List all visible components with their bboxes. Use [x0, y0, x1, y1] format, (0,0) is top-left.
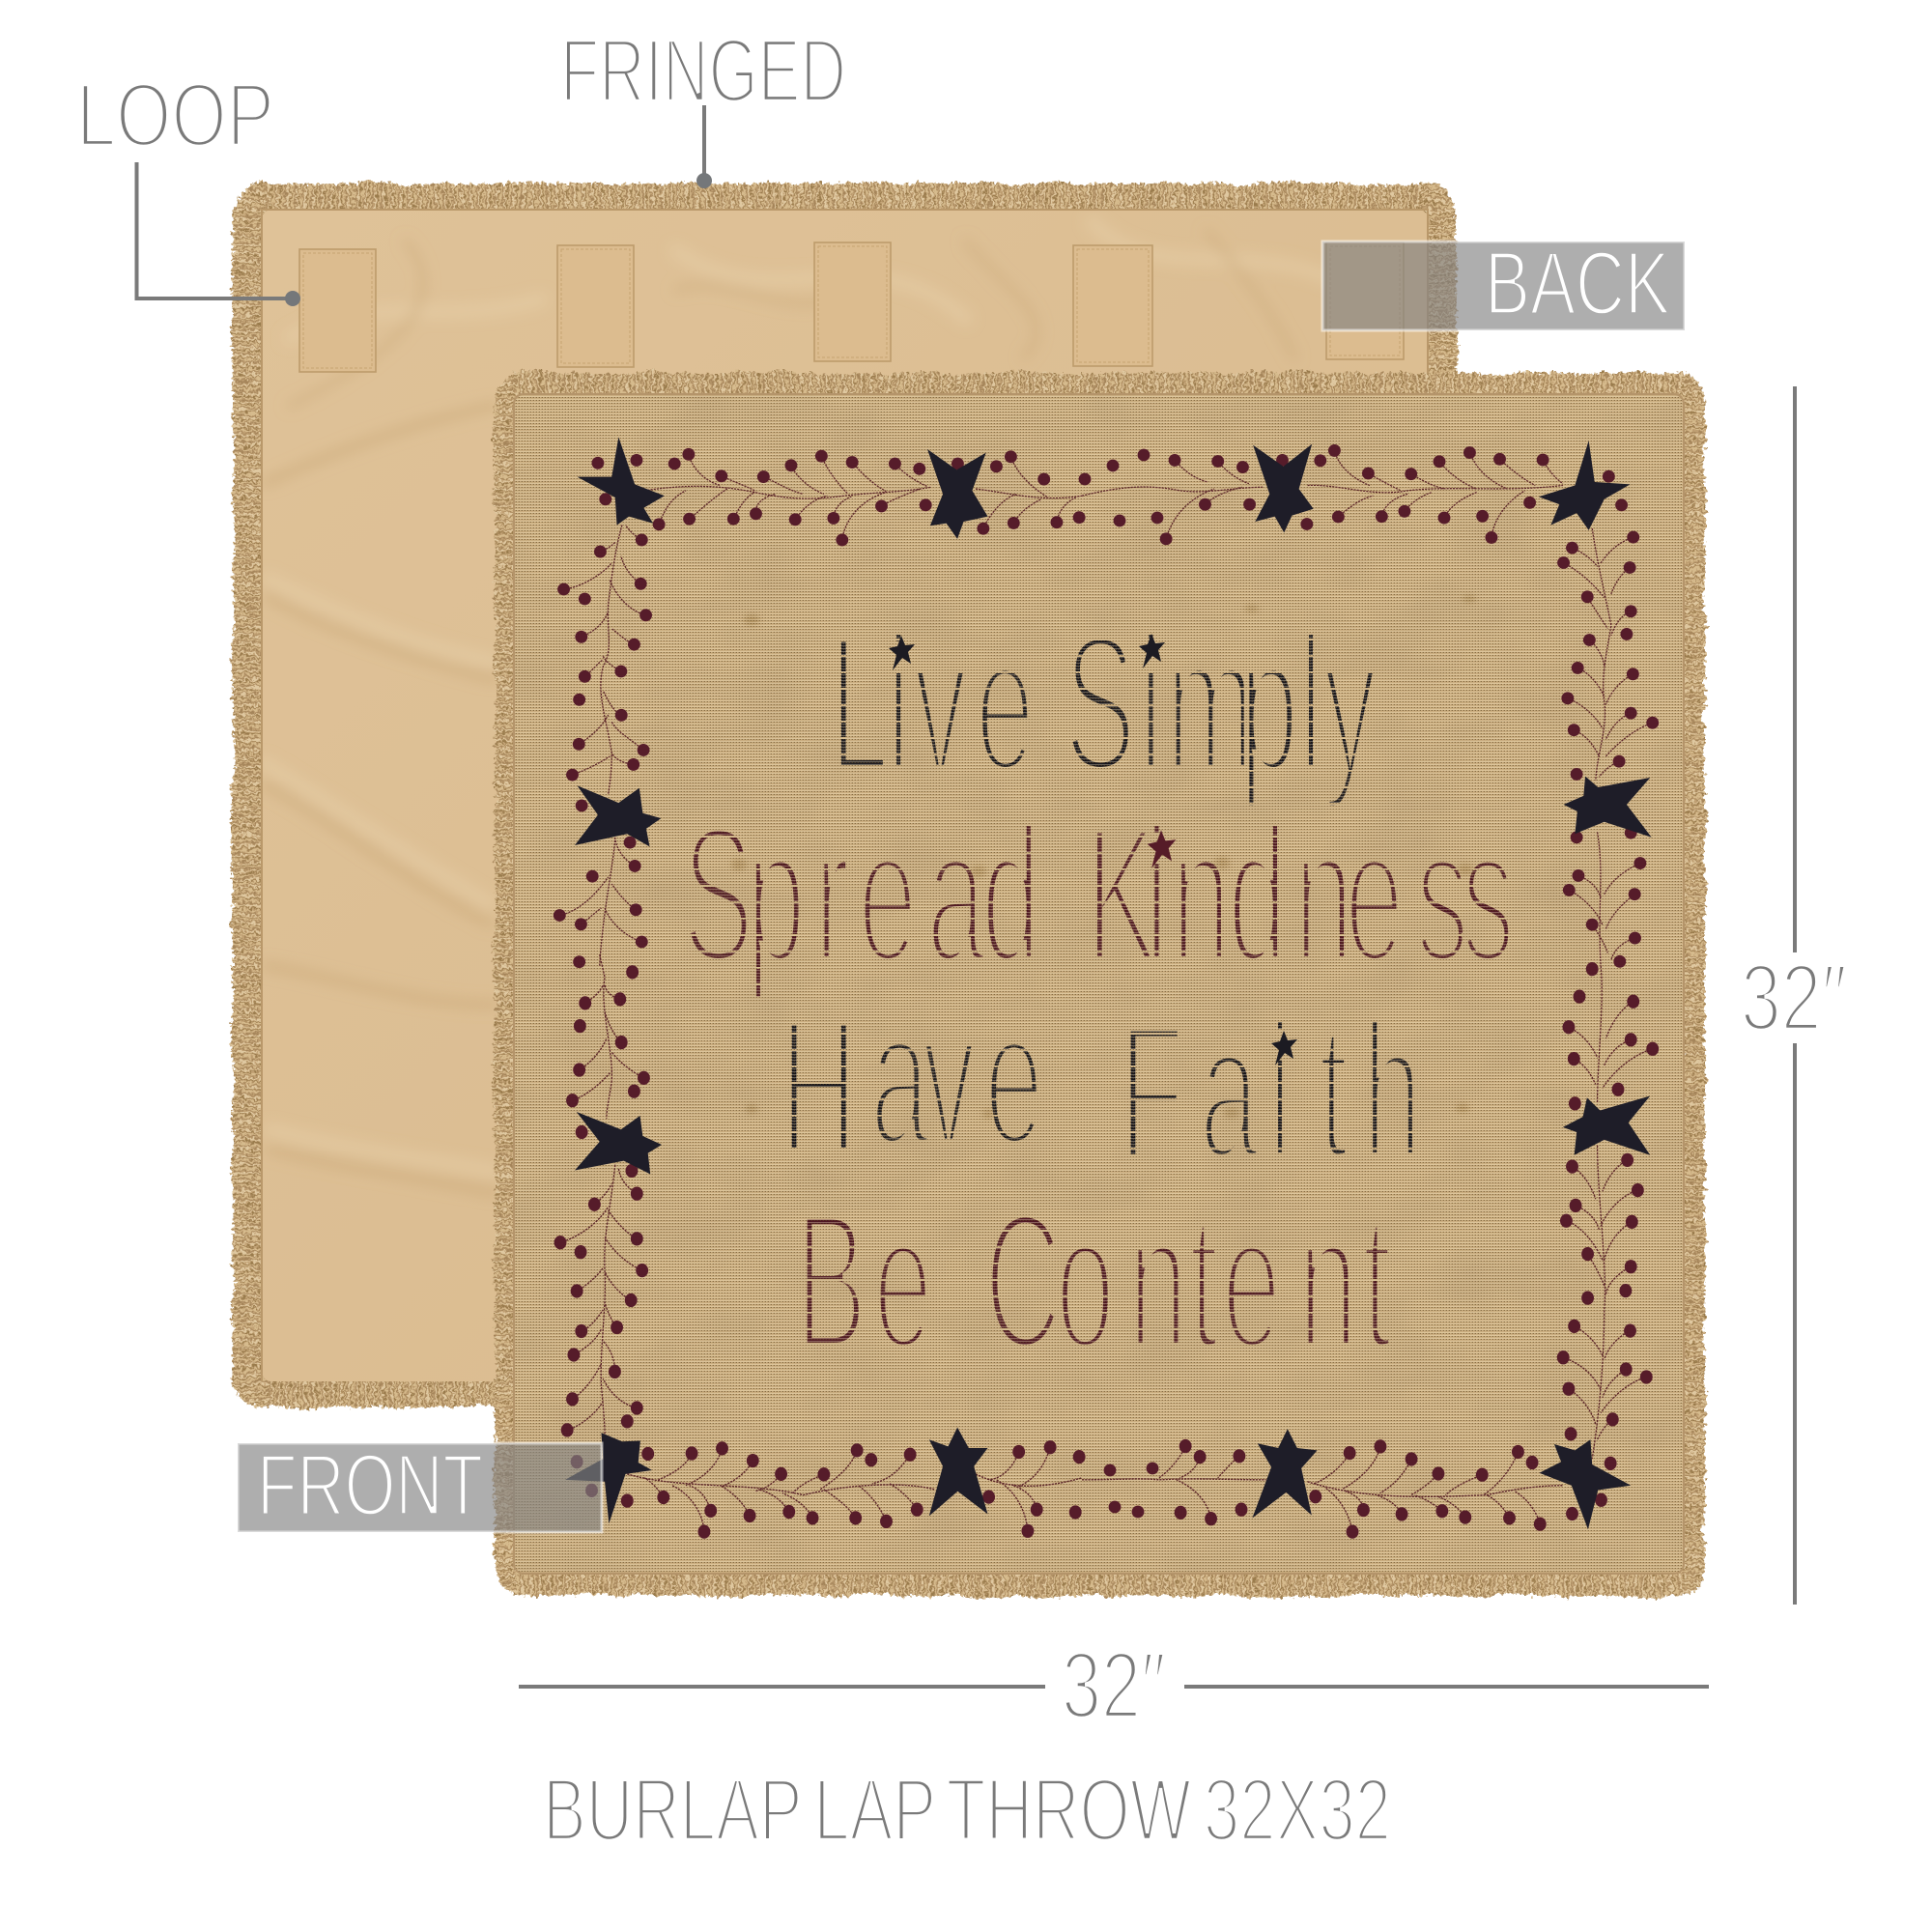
stars — [575, 437, 987, 846]
burlap base — [514, 394, 1684, 1574]
tag: BACK: BACK — [1485, 233, 1670, 333]
loop 2 — [557, 245, 634, 367]
label: FRINGED: FRINGED — [560, 20, 846, 121]
stars — [565, 1112, 987, 1523]
border section: top-right vines, berries and stars — [1082, 440, 1659, 968]
loop 5 — [1326, 242, 1404, 359]
front fringe border — [495, 373, 1705, 1596]
stitched saying — [683, 596, 1515, 1389]
small stars dotting the letter i — [889, 634, 1297, 1065]
vines — [559, 454, 1082, 966]
border section: top-left vines, berries and stars — [554, 437, 1086, 968]
stars — [1252, 1095, 1650, 1529]
berries — [1175, 962, 1659, 1539]
line: Spread Kindness: Spread Kindness — [683, 787, 1515, 1003]
border section: bottom-right vines, berries and stars — [1082, 962, 1659, 1539]
line: Live Simply: Live Simply — [830, 596, 1377, 811]
callout: LOOP — [76, 65, 300, 306]
loop 4 — [1073, 245, 1152, 366]
loop 1 — [299, 249, 376, 372]
vines — [1082, 966, 1653, 1532]
panel: front of burlap throw — [495, 373, 1705, 1596]
back cotton fabric — [262, 210, 1428, 1381]
stitch gaps — [676, 618, 1526, 1372]
stars — [1253, 440, 1652, 838]
tag: BACK — [1322, 233, 1685, 333]
leader dot: LOOP — [285, 291, 300, 306]
callout: FRINGED — [560, 20, 846, 188]
quilt tuft marks — [731, 595, 1476, 1119]
title: BURLAP LAP THROW 32X32 — [543, 1761, 1391, 1860]
berries — [554, 965, 1086, 1539]
loop 3 — [814, 242, 891, 361]
loop tabs — [299, 242, 1404, 372]
berries — [554, 448, 1086, 968]
berries — [1160, 444, 1659, 968]
dimension: width 32 inches: 32″ — [1062, 1633, 1166, 1738]
vines — [1082, 450, 1653, 966]
berries between border sections — [1079, 449, 1163, 1518]
burlap weave texture — [514, 394, 1684, 1574]
leader dot: FRINGED — [696, 173, 712, 188]
line: Have Faith: Have Faith — [781, 970, 1422, 1201]
back hem — [262, 210, 1428, 1381]
label: LOOP: LOOP — [76, 65, 274, 165]
tag: FRONT: FRONT — [257, 1437, 483, 1534]
dimension: height 32 inches: 32″ — [1741, 945, 1847, 1050]
leader line: LOOP — [137, 162, 293, 298]
back fringe border — [233, 184, 1457, 1407]
panel: back of quilted throw — [233, 184, 1457, 1407]
line: Be Content: Be Content — [796, 1174, 1392, 1389]
border section: bottom-left vines, berries and stars — [554, 954, 1086, 1539]
vines — [560, 954, 1082, 1532]
leader line: FRINGED — [702, 105, 706, 181]
